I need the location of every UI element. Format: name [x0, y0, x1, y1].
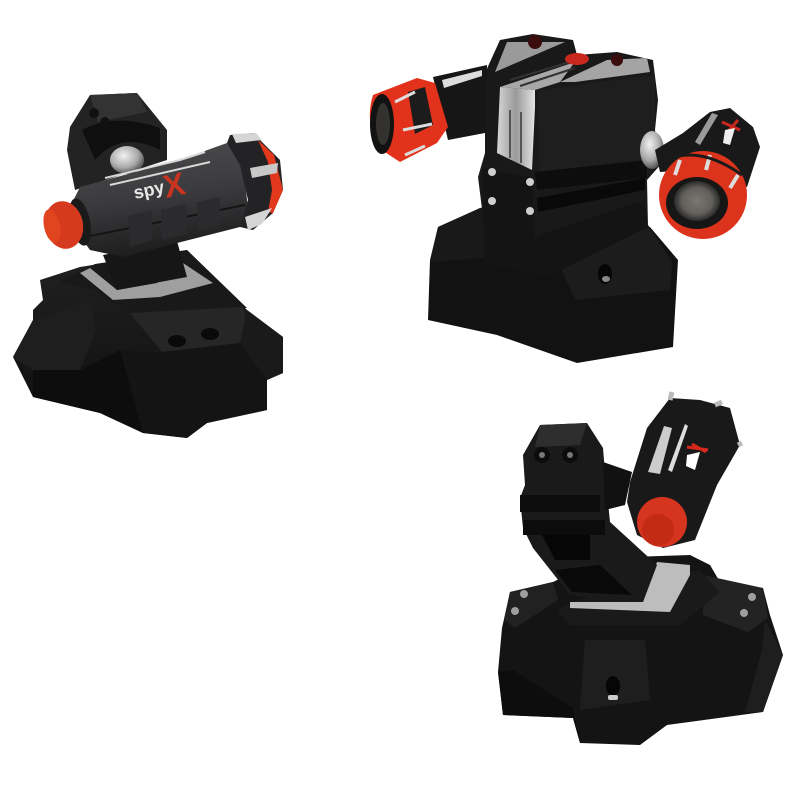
screws	[488, 168, 534, 215]
bottom turret base	[498, 555, 783, 745]
left turret rear head	[67, 93, 167, 190]
top turret left barrel	[370, 65, 487, 162]
top turret right barrel	[655, 108, 760, 239]
silver ball	[640, 131, 664, 169]
device: bottom right turret	[498, 392, 783, 745]
silver plate	[570, 562, 690, 612]
spyX logo	[132, 165, 189, 205]
spyX logo: X	[160, 165, 189, 205]
top turret base	[428, 206, 678, 363]
spyX logo: spy	[132, 177, 166, 203]
left turret red knob	[40, 196, 95, 252]
left turret red ring collar	[227, 133, 283, 230]
bottom turret red knob	[637, 497, 687, 547]
bottom turret barrel	[627, 392, 742, 548]
top turret tower	[478, 34, 664, 277]
bottom turret arm and head	[520, 423, 657, 602]
left turret base	[13, 250, 283, 438]
silver panel	[497, 87, 535, 170]
bottom turret connector	[603, 462, 632, 510]
device: left turret	[13, 93, 283, 438]
left turret barrel	[72, 140, 250, 257]
device: top right turret	[370, 34, 760, 363]
left turret mount arm	[103, 241, 187, 290]
